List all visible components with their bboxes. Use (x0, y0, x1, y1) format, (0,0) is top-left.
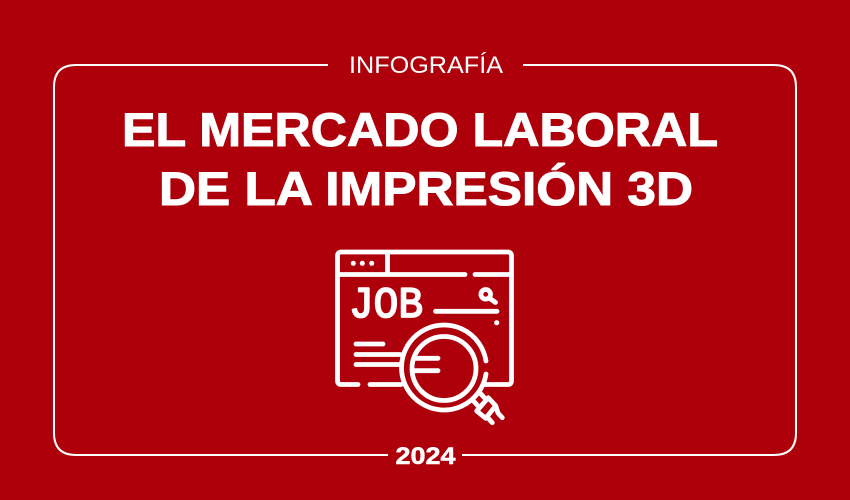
icon: window dots (351, 261, 374, 266)
magnifying glass inner ring (412, 336, 476, 400)
lines inside the lens (414, 358, 438, 371)
small magnifier lens (481, 290, 491, 299)
JOB lettering: JOB (349, 281, 423, 331)
browser toolbar (339, 253, 510, 274)
magnifying glass outer ring (402, 325, 486, 410)
icon: job search window with magnifying glass (338, 252, 512, 423)
frame with gaps for labels (54, 65, 796, 455)
eyebrow label: INFOGRAFÍA: INFOGRAFÍA (349, 52, 503, 79)
magnifying glass plug handle (474, 394, 502, 423)
title line 1: EL MERCADO LABORAL (122, 103, 718, 156)
browser window outline (338, 252, 512, 384)
text lines left (356, 344, 400, 364)
title line 2: DE LA IMPRESIÓN 3D (159, 162, 693, 215)
search line with small magnifier (436, 298, 497, 311)
title (122, 103, 718, 215)
year label: 2024 (396, 443, 456, 470)
small dot (494, 320, 499, 325)
